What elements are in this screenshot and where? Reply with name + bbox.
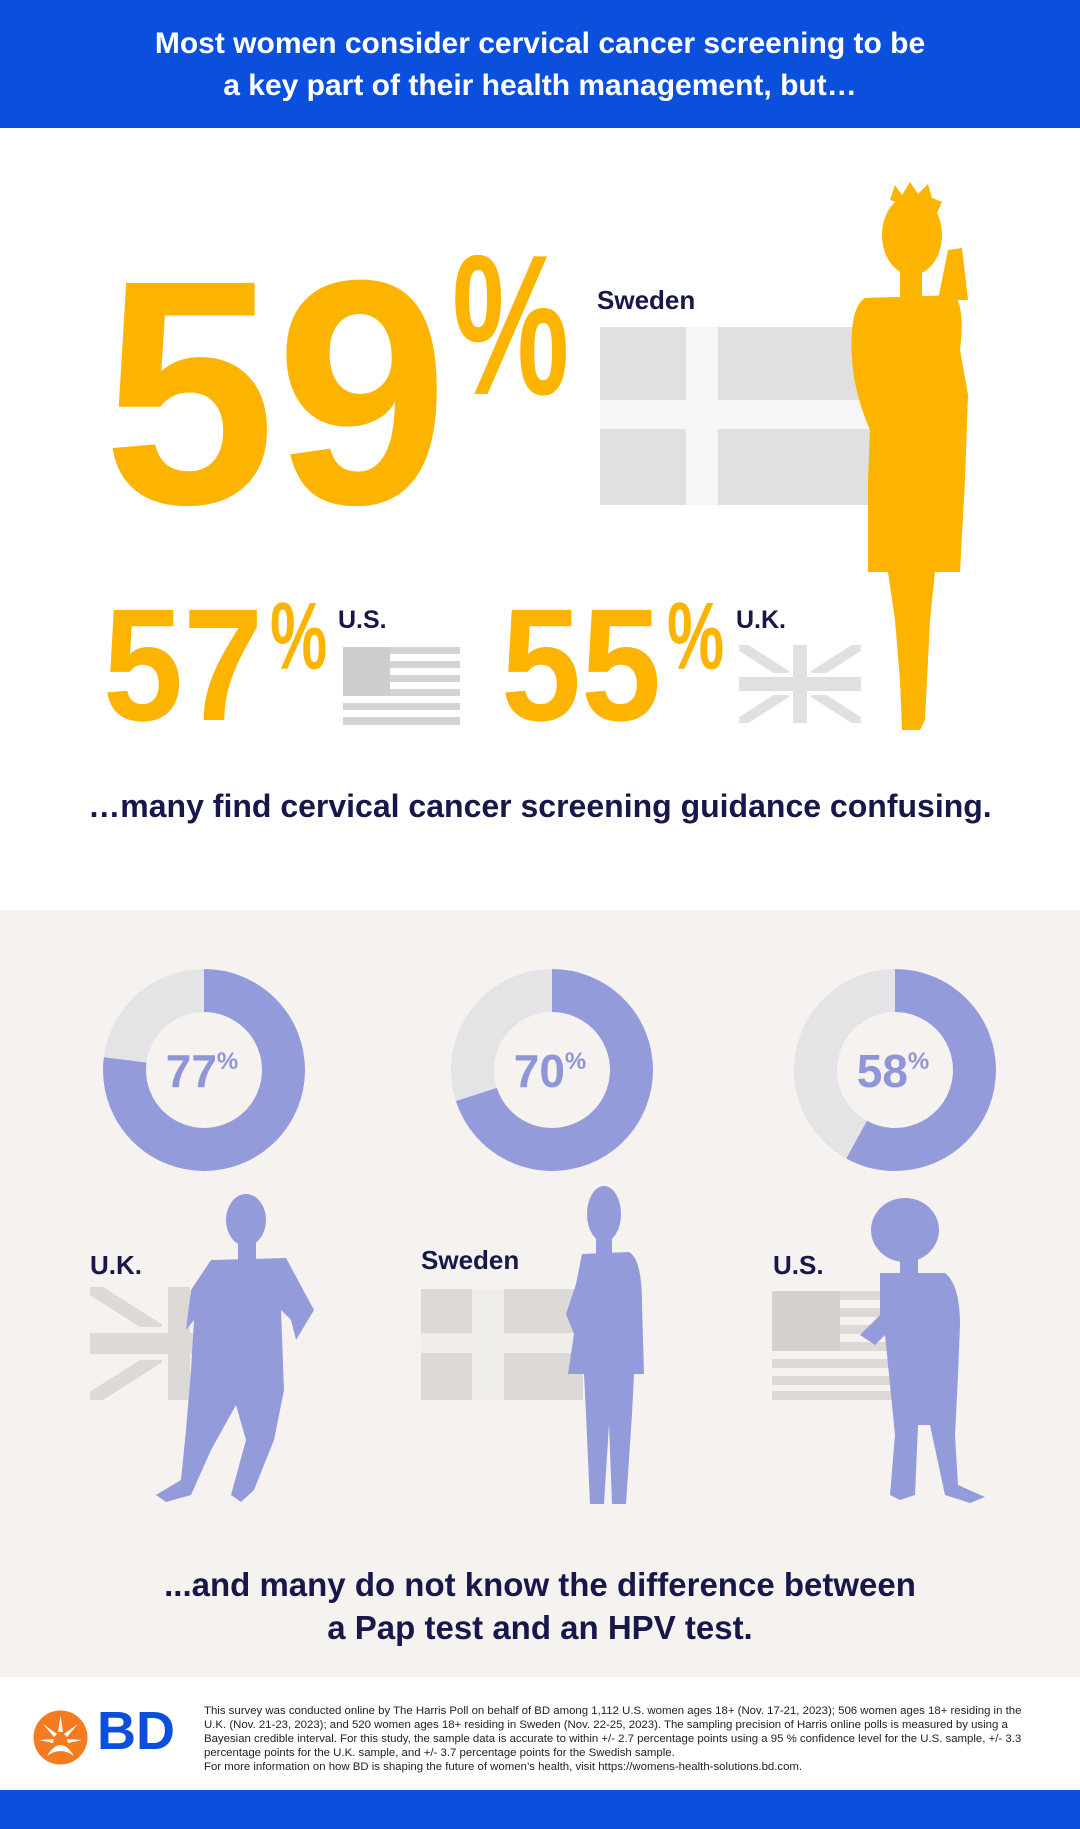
subheading: Pap test vs HPV test: ...and many do not know the difference between [164, 1566, 916, 1603]
header banner: a key part of their health management, but… [223, 69, 857, 102]
logo: BD: BD [97, 1701, 175, 1761]
subheading: Pap test vs HPV test [164, 1566, 916, 1646]
flag Sweden [600, 327, 870, 505]
flag Sweden [421, 1289, 583, 1400]
footnote text: percentage points for the U.K. sample, and +/- 3.7 percentage points for the Swedish sample. [204, 1747, 675, 1759]
footnote text: U.K. (Nov. 21-23, 2023); and 520 women ages 18+ residing in Sweden (Nov. 22-25, 2023). The sampling precision of Harris online polls is measured by using a [204, 1719, 1008, 1731]
stat 57% U.S.: 57 [103, 575, 263, 754]
subheading: Pap test vs HPV test: a Pap test and an HPV test. [327, 1609, 753, 1646]
donut 70%: % [565, 1048, 586, 1075]
label U.S.: U.S. [773, 1250, 824, 1280]
flag U.S. [772, 1291, 892, 1400]
label Sweden: Sweden [597, 285, 695, 315]
footnote text: Bayesian credible interval. For this study, the sample data is accurate to within +/- 2.7 percentage points using a 95 % confidence level for the U.S. sample, +/- 3.3 [204, 1733, 1021, 1745]
flag U.K. [90, 1287, 194, 1400]
icon: woman silhouette Sweden [566, 1186, 644, 1504]
label Sweden: Sweden [421, 1245, 519, 1275]
donut 58%: % [908, 1048, 929, 1075]
donut 70%: 70 [514, 1045, 565, 1097]
icon: yellow woman silhouette [851, 182, 968, 730]
flag U.S. [343, 647, 460, 725]
subheading: confusing guidance: …many find cervical cancer screening guidance confusing. [88, 788, 992, 824]
big stat 59% Sweden: % [452, 214, 569, 437]
donut 77%: % [217, 1048, 238, 1075]
header banner [0, 0, 1080, 128]
flag U.K. [739, 645, 861, 723]
footnote text [204, 1705, 1021, 1773]
label U.K.: U.K. [90, 1250, 142, 1280]
icon: woman silhouette UK [156, 1194, 314, 1502]
donut 70% [451, 969, 653, 1171]
stat 57% U.S.: % [270, 583, 327, 690]
panel: Pap vs HPV section [0, 910, 1080, 1677]
footer [0, 1677, 1080, 1790]
logo: BD [34, 1701, 175, 1764]
big stat 59% Sweden: 59 [103, 213, 448, 571]
label U.K.: U.K. [736, 606, 786, 634]
stat 55% U.K.: % [667, 583, 724, 690]
footnote text: For more information on how BD is shaping the future of women’s health, visit https://womens-health-solutions.bd.com. [204, 1761, 802, 1773]
donut 58% [794, 969, 996, 1171]
donut 77% [103, 969, 305, 1171]
header banner: Most women consider cervical cancer screening to be [155, 27, 925, 60]
donut 77%: 77 [166, 1045, 217, 1097]
stat 55% U.K.: 55 [501, 575, 661, 754]
label U.S.: U.S. [338, 606, 387, 634]
icon: woman silhouette US [860, 1198, 985, 1503]
bottom bar [0, 1790, 1080, 1829]
footnote text: This survey was conducted online by The Harris Poll on behalf of BD among 1,112 U.S. women ages 18+ (Nov. 17-21, 2023); 506 women ages 18+ residing in the [204, 1705, 1021, 1717]
donut 58%: 58 [857, 1045, 908, 1097]
